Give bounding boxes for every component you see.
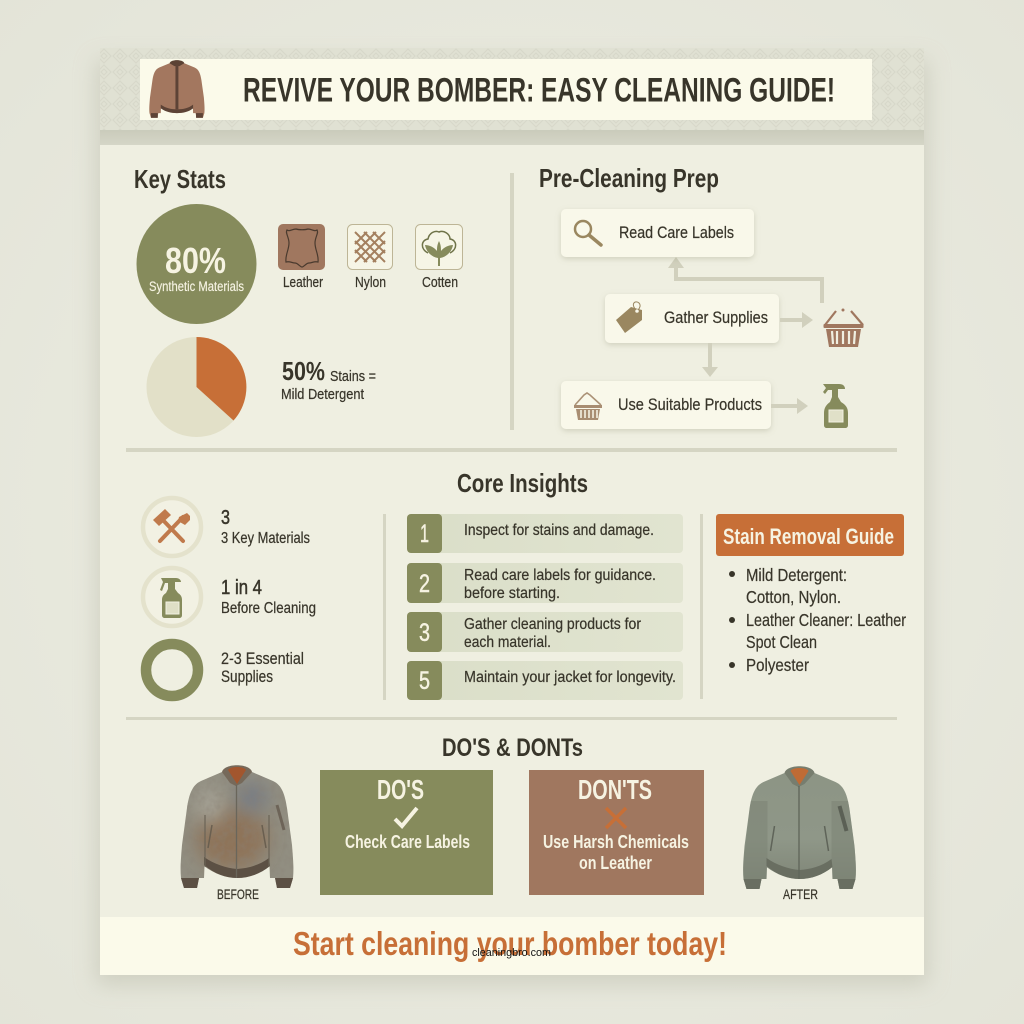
- label: after: AFTER: [783, 886, 818, 902]
- icon: price tag: [616, 302, 642, 333]
- header banner: [100, 48, 924, 145]
- stat circle: 80 percent synthetic: [136, 204, 256, 324]
- step 1: 1: [420, 520, 429, 548]
- heading: pre-cleaning prep: Pre-Cleaning Prep: [539, 163, 719, 193]
- icon: ring: [146, 644, 198, 696]
- step 2: before starting.: [464, 585, 560, 602]
- heading: key stats: Key Stats: [134, 164, 226, 194]
- panel: pre-cleaning prep: [539, 163, 864, 429]
- card: dos: DO'S: [377, 774, 424, 805]
- card: donts: on Leather: [579, 852, 652, 873]
- icon: leather: [278, 224, 325, 270]
- card: donts: Use Harsh Chemicals: [543, 831, 689, 852]
- footer call to action: [100, 917, 924, 975]
- step 3: Gather cleaning products for: [464, 616, 641, 633]
- icon: brush and tool: [143, 498, 201, 556]
- icon: magnifier: [575, 221, 601, 245]
- stat: key materials: [221, 507, 310, 547]
- icon: nylon: [348, 224, 392, 270]
- arrow: supplies to products: [702, 343, 718, 377]
- card: dos: Check Care Labels: [345, 831, 470, 852]
- stat: essential supplies: [221, 649, 304, 686]
- stat: essential supplies: 2-3 Essential: [221, 649, 304, 668]
- card: use suitable products: Use Suitable Products: [618, 395, 762, 414]
- pie chart: 50 percent stains: [146, 337, 246, 437]
- heading: dos and donts: DO'S & DONTs: [442, 734, 583, 762]
- stat text: mild detergent: Stains =: [330, 368, 376, 385]
- arrow: supplies to basket: [780, 312, 813, 328]
- arrow: products to spray: [771, 398, 808, 414]
- card: read care labels: Read Care Labels: [619, 223, 734, 242]
- heading: stain removal guide: [716, 514, 904, 556]
- stat text: mild detergent: [281, 356, 376, 403]
- bullet list: Spot Clean: [746, 632, 817, 652]
- card: gather supplies: Gather Supplies: [664, 308, 768, 327]
- icon: bomber jacket: [149, 60, 205, 118]
- stat circle: 80 percent synthetic: 80%: [165, 240, 226, 281]
- step 5: 5: [419, 667, 430, 695]
- step 5: [407, 661, 683, 700]
- heading: core insights: Core Insights: [457, 468, 588, 498]
- step 3: 3: [419, 619, 430, 647]
- stat: before cleaning: Before Cleaning: [221, 600, 316, 617]
- stat text: mild detergent: 50%: [282, 356, 325, 386]
- label: nylon: Nylon: [355, 275, 386, 291]
- card: gather supplies: [605, 294, 779, 343]
- watermark: cleaningbro.com: [472, 947, 551, 959]
- step 1: Inspect for stains and damage.: [464, 522, 654, 539]
- card: read care labels: [561, 209, 754, 257]
- card: dos: [320, 770, 493, 895]
- heading: stain removal guide: Stain Removal Guide: [723, 524, 894, 549]
- bullet list: Cotton, Nylon.: [746, 587, 841, 607]
- label: before: BEFORE: [217, 886, 259, 902]
- bullet list: Leather Cleaner: Leather: [746, 610, 906, 630]
- card: donts: [529, 770, 704, 895]
- stat text: mild detergent: Mild Detergent: [281, 386, 365, 403]
- step 2: Read care labels for guidance.: [464, 567, 656, 584]
- step 3: [407, 612, 683, 652]
- stat circle: 80 percent synthetic: Synthetic Materials: [149, 279, 244, 294]
- bullet list: [729, 565, 906, 675]
- stat: key materials: 3: [221, 507, 230, 529]
- stat: before cleaning: 1 in 4: [221, 577, 262, 599]
- panel: key stats: [134, 164, 462, 437]
- step 2: 2: [419, 570, 430, 598]
- icon: cotton: [416, 224, 462, 270]
- icon: spray in circle: [143, 568, 201, 626]
- icon: small basket: [574, 393, 602, 420]
- label: cotton: Cotten: [422, 275, 458, 291]
- panel: core insights: [143, 468, 906, 700]
- stat: key materials: 3 Key Materials: [221, 530, 310, 547]
- panel: dos and donts: [175, 734, 862, 902]
- icon: spray bottle: [823, 384, 848, 428]
- stat: before cleaning: [221, 577, 316, 617]
- arrow: supplies to labels: [668, 257, 822, 303]
- icon: basket: [824, 308, 864, 347]
- step 3: each material.: [464, 634, 551, 651]
- step 2: [407, 563, 683, 603]
- bullet list: Polyester: [746, 655, 809, 675]
- jacket: before: [180, 765, 294, 888]
- card: use suitable products: [561, 381, 771, 429]
- footer call to action: Start cleaning your bomber today!: [293, 925, 727, 962]
- stain removal guide: [716, 514, 906, 675]
- jacket: after: [743, 766, 856, 889]
- label: leather: Leather: [283, 275, 323, 291]
- card: donts: DON'TS: [578, 774, 652, 805]
- step 5: Maintain your jacket for longevity.: [464, 669, 676, 686]
- step 1: [407, 514, 683, 553]
- stat: essential supplies: Supplies: [221, 667, 273, 686]
- main panel: [100, 145, 924, 975]
- bullet list: Mild Detergent:: [746, 565, 847, 585]
